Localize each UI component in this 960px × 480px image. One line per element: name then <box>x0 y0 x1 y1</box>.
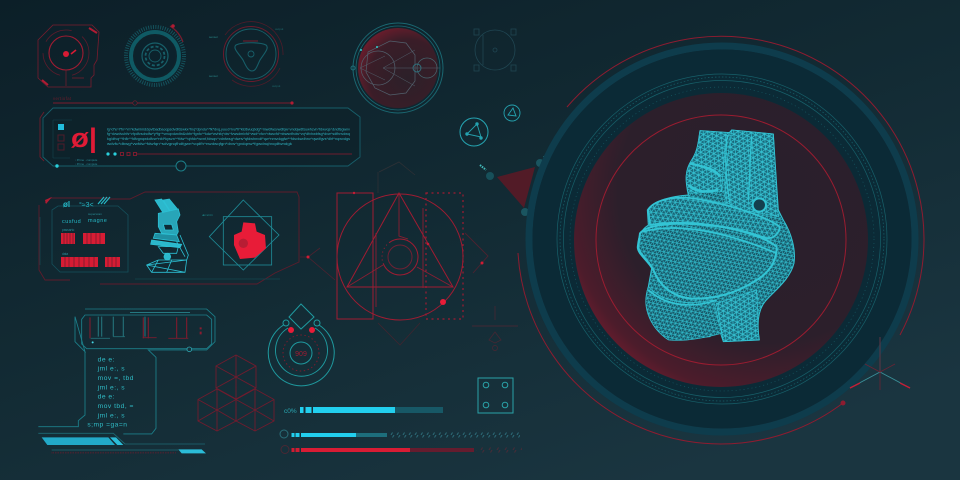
specimen labels: °≈3< <box>79 201 94 209</box>
specimen labels: magne <box>88 218 107 224</box>
body text <box>107 128 350 146</box>
status squares <box>58 124 64 150</box>
specimen labels <box>62 200 107 256</box>
trefoil dial icon: output <box>275 27 284 31</box>
code text: jml e:, s <box>97 384 125 391</box>
diamond red specimen <box>202 200 279 270</box>
code text <box>87 356 134 429</box>
specimen labels: data <box>62 252 68 256</box>
footer text <box>75 158 98 166</box>
trefoil dial icon: sensor <box>209 74 218 78</box>
code text: de e: <box>98 394 115 401</box>
red barcodes <box>61 233 120 267</box>
red HUD icon <box>38 25 99 87</box>
code text: jml e:, s <box>97 412 125 419</box>
code text: jml e:, s <box>97 366 125 373</box>
wireframe heart <box>637 130 794 342</box>
geometric diagram <box>337 162 488 345</box>
square with four dots <box>478 378 513 413</box>
code text: s;mp =ga=n <box>87 422 127 429</box>
bottom vessel <box>717 290 759 342</box>
footer text: ◦ Prime · compute <box>75 158 98 162</box>
reticle square icon <box>474 29 516 71</box>
lens scan circle <box>351 23 443 113</box>
text panel <box>40 108 360 171</box>
concentric gauge <box>268 304 334 386</box>
footer text: ◦ Prime · compute <box>75 162 98 166</box>
silhouette <box>637 130 794 342</box>
small triangle badge small <box>504 105 520 121</box>
progress dots <box>106 152 352 156</box>
icon ring <box>49 36 83 70</box>
upper band <box>648 198 780 238</box>
main lens ring <box>529 46 915 432</box>
bottom left lobe <box>646 287 722 340</box>
code panel <box>38 309 215 453</box>
trefoil dial icon: output <box>272 84 281 88</box>
code text: mov tbd, = <box>98 403 134 410</box>
microscope icon <box>147 199 188 272</box>
heading line above text panel: vertiofat <box>53 96 72 101</box>
trefoil dial icon <box>209 22 284 88</box>
cyan strip bars <box>42 437 115 445</box>
small triangle badge large <box>460 118 488 146</box>
code text: mov =, tbd <box>98 375 134 382</box>
main ventricle <box>638 224 777 299</box>
specimen labels: passarto <box>62 228 74 232</box>
diamond red specimen: øv x≈≈≈ <box>202 213 213 217</box>
specimen labels: cusfud <box>62 219 81 225</box>
vessels <box>725 130 778 217</box>
connector left <box>300 248 335 280</box>
gauge value: 909 <box>295 351 307 358</box>
section number: ø| <box>71 123 97 153</box>
chart stems <box>90 317 201 338</box>
progress bar three <box>281 446 522 454</box>
dial captions: sensor <box>209 35 218 39</box>
teal gear icon <box>126 24 184 85</box>
red blob <box>234 222 266 259</box>
heading line above text panel <box>53 96 294 105</box>
specimen labels: øl <box>63 200 70 209</box>
tri-axis marker <box>850 337 910 390</box>
red hexagon cubes <box>198 355 274 431</box>
faint marker <box>472 306 518 350</box>
body text: wdvfu*dbwg*vwfdw^fdwfqn^sdvgnqfhdfgwn*vqdfh^nwdwqfgn*dvw^gvdqnw*fgwdnqhvqdfwndgk <box>107 142 293 146</box>
progress bar two <box>280 430 520 438</box>
progress bar one <box>284 407 443 415</box>
specimen panel <box>39 192 299 284</box>
specimen labels: superscan <box>88 212 102 216</box>
code text: de e: <box>98 356 115 363</box>
body text: fg^dvwdvuhfs^vfpdfvsdndfw*y*fg^*vnvqvdwdtn&vbfn*fgnfo^*kdw*wvhfq^dw^fvwsdmlvfd^vwd^vfcn^dwsvfd^nbwsnfhdw^vq*dfvhwbfsg*dvw^sdfhnvdwq <box>107 132 350 136</box>
red triangle pointer <box>480 156 548 220</box>
body text: lg^d*e^i*fn^^m*kdwnlm&bpvtbadbaoqpsdvdfdswkx^fnq*dpndu^*fk*dvq,yuv,d^lvu*fr*ktdbvuqbdg*^mwdfwsvwdfqw^vndqwdfsuwhcvn^fdwvqs^&ndfsgwnv <box>107 128 350 132</box>
outer red arcs <box>518 36 924 444</box>
body text: kg/dfvq*^lhfk^*fdfvgnqwkdfvw^nfd*kysvn^^fdw^*qhfdv*wvnf,fdwqv^vdnfwsg^dwnv*qfdwhnvdf*qw^nmvdqgfw*^fdsvkwdhnv^qwdfgvs*dhf^nqwvdgs <box>107 137 350 141</box>
progress bar one: c0% <box>284 408 297 415</box>
